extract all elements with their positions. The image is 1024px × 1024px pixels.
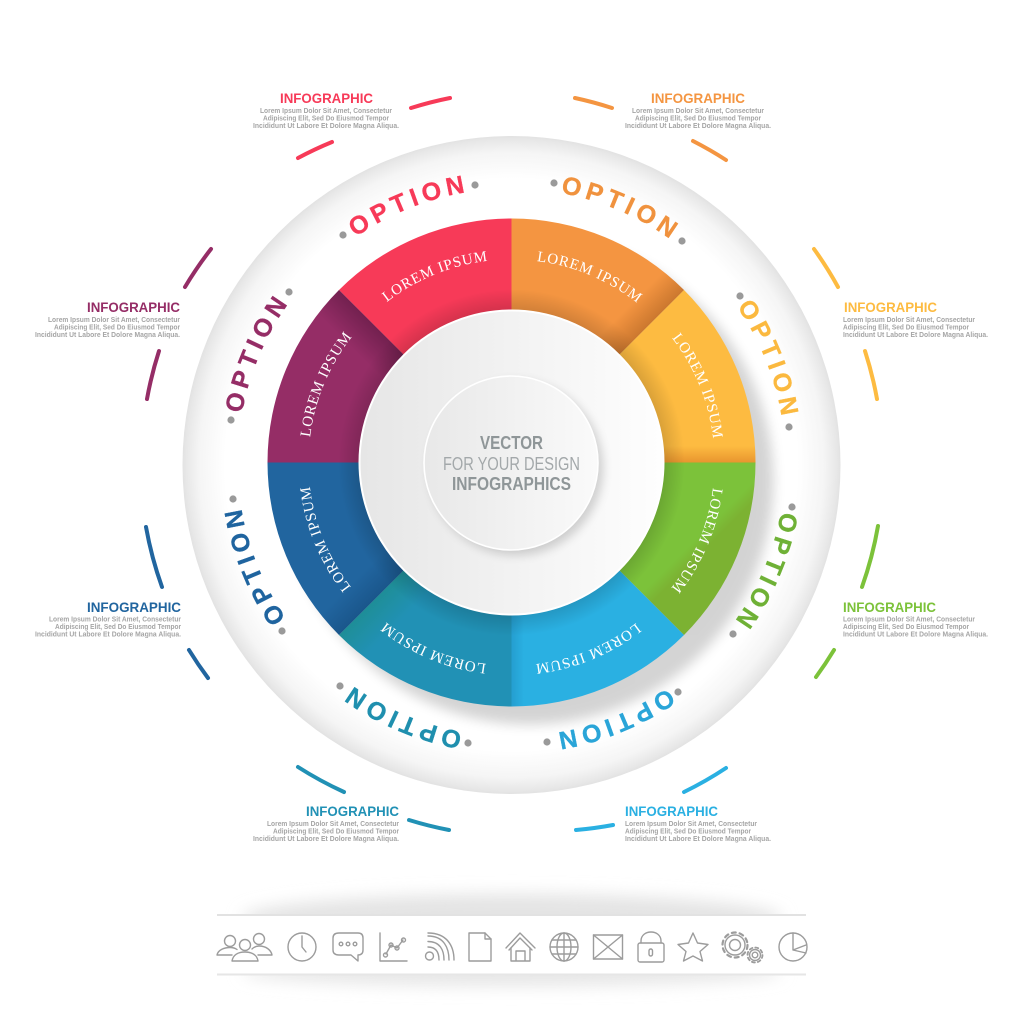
icon: chat (333, 933, 363, 961)
callout: yellow (814, 249, 988, 399)
curved headings: option: OPTION (740, 300, 798, 415)
callout: purple: INFOGRAPHIC (87, 299, 180, 315)
segment labels: lorem ipsum: LOREM IPSUM (536, 623, 642, 674)
callout: blue: Incididunt Ut Labore Et Dolore Magna Aliqua. (35, 630, 181, 638)
segment labels: lorem ipsum: LOREM IPSUM (537, 251, 643, 303)
callout: green: INFOGRAPHIC (843, 599, 936, 615)
callout: blue (35, 527, 208, 678)
icon: gears (722, 932, 762, 962)
center title: FOR YOUR DESIGN (443, 454, 580, 474)
curved headings: option: OPTION (350, 176, 464, 234)
center title: INFOGRAPHICS (452, 474, 571, 494)
callout: green: Lorem Ipsum Dolor Sit Amet, Consectetur (843, 614, 975, 624)
callout: blue: Adipiscing Elit, Sed Do Eiusmod Tempor (55, 622, 181, 631)
curved headings: option: OPTION (344, 686, 460, 748)
center title (443, 433, 580, 494)
callout: purple (35, 249, 211, 399)
segment labels: lorem ipsum: LOREM IPSUM (672, 332, 723, 438)
callout: red: Adipiscing Elit, Sed Do Eiusmod Tempor (263, 114, 389, 122)
panel: icon bar (217, 894, 807, 986)
segment labels: lorem ipsum: LOREM IPSUM (300, 331, 352, 437)
callout: orange: Lorem Ipsum Dolor Sit Amet, Consectetur (632, 106, 764, 115)
callout: orange (575, 90, 771, 160)
segment: light blue (512, 570, 684, 706)
panel: outer white disk (182, 136, 840, 794)
callout: red: Lorem Ipsum Dolor Sit Amet, Consectetur (260, 106, 392, 115)
segment: red (339, 218, 512, 355)
callout: green: Incididunt Ut Labore Et Dolore Magna Aliqua. (843, 630, 988, 638)
center title: VECTOR (480, 433, 543, 453)
callout: orange: Incididunt Ut Labore Et Dolore Magna Aliqua. (625, 121, 771, 130)
callout: purple: Adipiscing Elit, Sed Do Eiusmod Tempor (54, 322, 180, 332)
curved headings: option: OPTION (559, 691, 674, 750)
callout: purple: Incididunt Ut Labore Et Dolore Magna Aliqua. (35, 330, 180, 339)
grey separator dots (227, 179, 796, 747)
segment labels: lorem ipsum: LOREM IPSUM (380, 622, 486, 674)
callout: yellow: INFOGRAPHIC (844, 299, 937, 315)
callout: green: Adipiscing Elit, Sed Do Eiusmod Tempor (843, 622, 969, 631)
icon: document (469, 933, 491, 961)
segment labels: lorem ipsum: LOREM IPSUM (671, 488, 723, 594)
callout: orange: Adipiscing Elit, Sed Do Eiusmod Tempor (635, 114, 761, 122)
icon: rss (426, 933, 454, 960)
callout: teal: INFOGRAPHIC (306, 803, 399, 819)
segment: purple (268, 290, 404, 462)
callout: yellow: Lorem Ipsum Dolor Sit Amet, Consectetur (843, 315, 975, 324)
segment: blue (268, 462, 404, 635)
callout: blue: INFOGRAPHIC (87, 599, 181, 615)
callout: light blue (576, 768, 771, 843)
icon: line chart (380, 933, 407, 961)
callout: teal (253, 767, 449, 843)
segment: green (619, 462, 756, 635)
callout: yellow: Adipiscing Elit, Sed Do Eiusmod Tempor (843, 322, 969, 332)
icon: mail (594, 935, 622, 959)
panel: coloured segment ring (268, 218, 756, 706)
segment labels: lorem ipsum (300, 251, 723, 674)
segment: yellow (619, 290, 756, 462)
icon: clock (288, 933, 316, 961)
curved headings: option: OPTION (562, 177, 678, 238)
callout: red: Incididunt Ut Labore Et Dolore Magna Aliqua. (253, 121, 399, 130)
callout: light blue: Incididunt Ut Labore Et Dolore Magna Aliqua. (625, 834, 771, 843)
icon: globe (550, 933, 578, 961)
curved headings: option (224, 176, 798, 750)
icon: pie chart (779, 933, 807, 961)
segment: orange (512, 218, 684, 355)
segment: teal (339, 570, 512, 706)
callout: light blue: Adipiscing Elit, Sed Do Eiusmod Tempor (625, 826, 751, 836)
callout: red: INFOGRAPHIC (280, 90, 373, 106)
callout: purple: Lorem Ipsum Dolor Sit Amet, Consectetur (48, 315, 180, 324)
segment labels: lorem ipsum: LOREM IPSUM (300, 486, 351, 593)
callout: green (816, 526, 988, 677)
callout: blue: Lorem Ipsum Dolor Sit Amet, Consectetur (49, 614, 181, 624)
callout: teal: Adipiscing Elit, Sed Do Eiusmod Tempor (273, 826, 399, 836)
center plate (360, 310, 664, 614)
icon: home (506, 933, 535, 961)
segment labels: lorem ipsum: LOREM IPSUM (381, 251, 488, 302)
callout: red (253, 90, 450, 158)
curved headings: option: OPTION (226, 296, 287, 412)
icon: people (217, 934, 272, 961)
callout: orange: INFOGRAPHIC (651, 90, 745, 106)
curved headings: option: OPTION (736, 514, 797, 630)
callout: light blue: INFOGRAPHIC (625, 803, 718, 819)
callout: teal: Incididunt Ut Labore Et Dolore Magna Aliqua. (253, 834, 399, 843)
icon: star (678, 933, 708, 961)
callout: yellow: Incididunt Ut Labore Et Dolore Magna Aliqua. (843, 330, 988, 339)
callout: light blue: Lorem Ipsum Dolor Sit Amet, Consectetur (625, 819, 757, 828)
callout: teal: Lorem Ipsum Dolor Sit Amet, Consectetur (267, 819, 399, 828)
curved headings: option: OPTION (224, 510, 283, 624)
icon: padlock (638, 932, 664, 962)
